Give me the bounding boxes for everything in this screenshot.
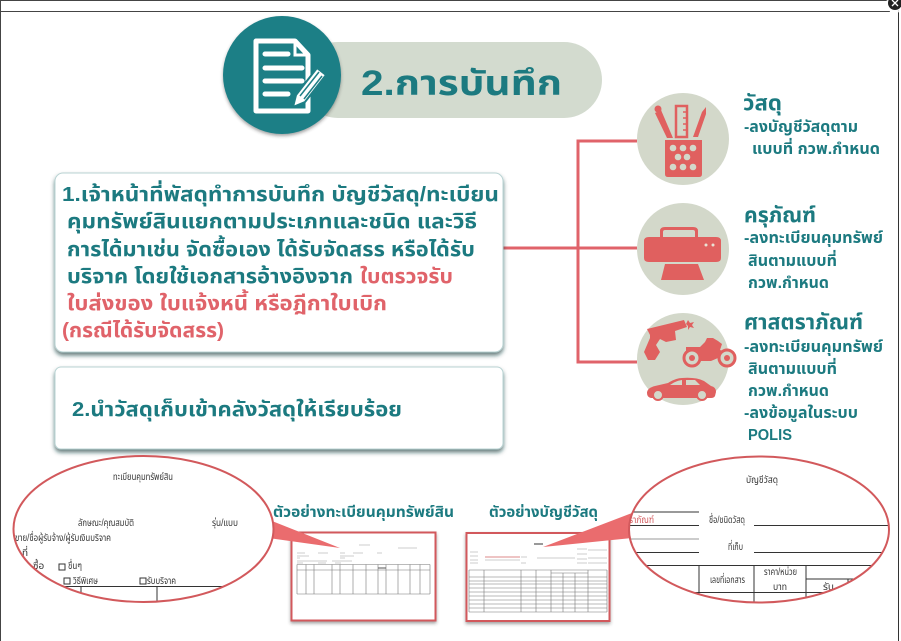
callout: asset register magnified: ซื้อ (33, 558, 45, 572)
callout: asset register magnified: ลักษณะ/คุณสมบัติ (78, 517, 134, 529)
text: durable goods (744, 204, 883, 292)
callout: supply ledger magnified (625, 456, 890, 605)
text: firearms and vehicles: สินตามแบบที่ (748, 357, 837, 378)
callout: supply ledger magnified: บัญชีวัสดุ (746, 474, 778, 486)
callout: asset register magnified: รับบริจาค (147, 575, 176, 587)
text: firearms and vehicles: กวพ.กำหนด (748, 383, 829, 400)
label: supply ledger sample: ตัวอย่างบัญชีวัสดุ (489, 503, 598, 521)
callout: supply ledger magnified: เลขที่เอกสาร (710, 572, 745, 586)
step 1 text: (กรณีได้รับจัดสรร) (62, 320, 224, 342)
text: durable goods: ครุภัณฑ์ (744, 204, 816, 228)
callout: supply ledger magnified: ราภัณฑ์ (629, 514, 654, 526)
icon: printer (637, 203, 729, 295)
callout: asset register magnified: ขาย/ชื่อผู้รับจ้าง/ผู้รับเงินบริจาค (15, 530, 111, 544)
text: firearms and vehicles: -ลงข้อมูลในระบบ (744, 404, 858, 423)
title circle (223, 16, 341, 134)
callout: asset register magnified: ทะเบียนคุมทรัพย์สิน (113, 471, 173, 483)
text: supplies (743, 92, 880, 158)
icon: supplies (637, 93, 729, 185)
callout wedge: left (272, 521, 340, 548)
step 1 text: 1.เจ้าหน้าที่พัสดุทำการบันทึก บัญชีวัสดุ/ทะเบียน (62, 180, 499, 206)
callout: supply ledger magnified: ที่เก็บ (728, 539, 743, 553)
callout: supply ledger magnified: บาท (773, 582, 787, 593)
step 1 text: บริจาค โดยใช้เอกสารอ้างอิงจาก (67, 266, 353, 288)
callout: asset register magnified (14, 456, 274, 605)
text: durable goods: กวพ.กำหนด (748, 275, 829, 292)
title text: 2.การบันทึก (361, 64, 562, 103)
callout: asset register magnified: ชื่นๆ (68, 558, 82, 572)
title pill (300, 42, 602, 118)
text: durable goods: -ลงทะเบียนคุมทรัพย์ (744, 230, 883, 247)
text: supplies: แบบที่ กวพ.กำหนด (752, 137, 880, 158)
callout: asset register magnified: รุ่น/แบบ (212, 516, 238, 529)
step 1 text: ใบส่งของ ใบแจ้งหนี้ หรือฎีกาใบเบิก (67, 289, 387, 315)
text: firearms and vehicles: -ลงทะเบียนคุมทรัพย์ (744, 339, 883, 356)
small heading on ledger thumbnail (534, 543, 543, 545)
supply ledger form thumbnail (466, 533, 610, 621)
asset register form thumbnail (292, 532, 436, 620)
text: supplies: วัสดุ (743, 92, 782, 116)
callout: supply ledger magnified: รับ (823, 581, 834, 593)
title banner (223, 16, 602, 134)
callout wedge: right (543, 513, 632, 547)
close button icon (886, 0, 901, 13)
text: firearms and vehicles (744, 311, 883, 444)
callout: asset register magnified: ที่ (22, 545, 28, 559)
step 1 text (62, 180, 499, 342)
text: supplies: -ลงบัญชีวัสดุตาม (744, 119, 858, 136)
icon: weapons and vehicles (637, 313, 735, 405)
callout: supply ledger magnified: ราคา/หน่วย (764, 565, 797, 578)
step 1 text: ใบตรวจรับ (360, 266, 453, 288)
text: durable goods: สินตามแบบที่ (748, 249, 837, 270)
icon: document and pencil (256, 41, 326, 111)
text: firearms and vehicles: POLIS (748, 427, 792, 444)
panel: step 2 (55, 367, 503, 449)
callout: asset register magnified: วิธีพิเศษ (72, 575, 98, 587)
step 1 text: คุมทรัพย์สินแยกตามประเภทและชนิด และวิธี (67, 211, 477, 233)
step 2 text: 2.นำวัสดุเก็บเข้าคลังวัสดุให้เรียบร้อย (72, 398, 402, 421)
text: firearms and vehicles: ศาสตราภัณฑ์ (744, 311, 863, 334)
connector lines (503, 141, 637, 362)
label: asset register sample: ตัวอย่างทะเบียนคุมทรัพย์สิน (273, 503, 454, 521)
step 1 text: การได้มาเช่น จัดซื้อเอง ได้รับจัดสรร หรือได้รับ (67, 235, 475, 261)
callout: supply ledger magnified: ชื่อ/ชนิดวัสดุ (709, 512, 745, 526)
panel: step 1 (55, 173, 503, 352)
